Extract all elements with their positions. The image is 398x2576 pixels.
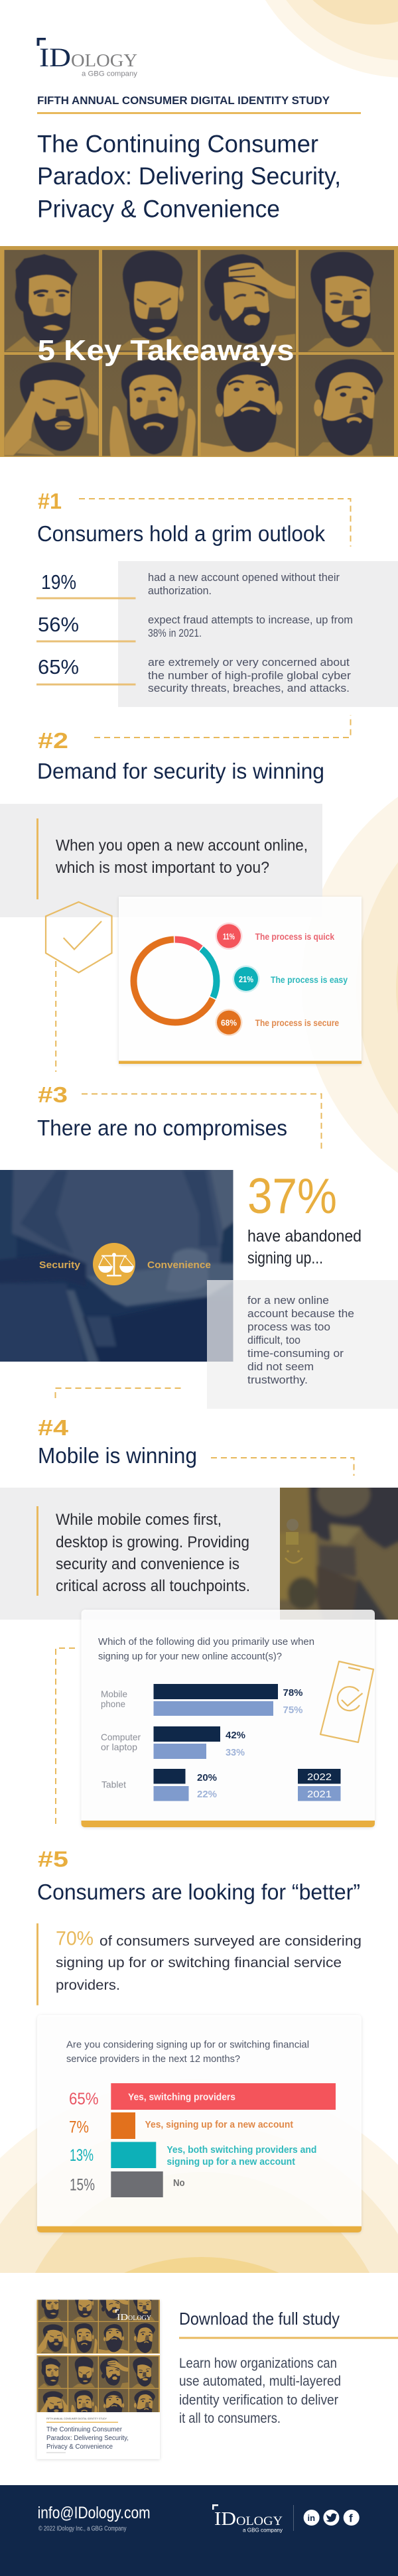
grey explanation panel: difficult, too: [247, 1334, 300, 1346]
stat 65%: the number of high-profile global cyber: [148, 669, 351, 682]
label: convenience: Convenience: [147, 1259, 211, 1271]
section 2: demand for security is winning: [0, 715, 362, 1072]
legend 11%: [215, 923, 334, 950]
bars: computer or laptop: Computer: [101, 1732, 141, 1742]
heading 5: Consumers are looking for “better”: [37, 1880, 360, 1904]
dashed connector 1: [79, 499, 350, 547]
logo: a GBG company: [82, 70, 138, 78]
stat 19%: [36, 570, 340, 600]
grey explanation panel: [207, 1280, 398, 1409]
icon: phone with check: [320, 1661, 373, 1742]
bar 7%: 7%: [69, 2118, 89, 2137]
grey explanation panel: time-consuming or: [247, 1347, 344, 1360]
icon: linkedin: in: [308, 2513, 315, 2523]
download text: use automated, multi-layered: [179, 2374, 341, 2389]
statement with 70%: signing up for or switching financial service: [56, 1955, 342, 1970]
stat 19%: 19%: [41, 570, 76, 594]
grey explanation panel: did not seem: [247, 1360, 314, 1373]
footer logo: a GBG company: [243, 2527, 283, 2534]
icon: facebook: [344, 2510, 360, 2526]
section 3: there are no compromises: [0, 1082, 398, 1409]
number 2: #2: [38, 728, 68, 753]
bars: computer or laptop: [101, 1726, 245, 1759]
statement text: [56, 1511, 250, 1595]
statement with 70%: 70%: [56, 1927, 94, 1949]
chart question: Which of the following did you primarily use when: [98, 1636, 314, 1647]
statement text: While mobile comes first,: [56, 1511, 222, 1529]
question text: [55, 837, 308, 877]
bar 7%: Yes, signing up for a new account: [145, 2119, 293, 2130]
legend 21%: The process is easy: [271, 974, 348, 985]
stat 65%: security threats, breaches, and attacks.: [148, 682, 350, 694]
cover logo: ID: [117, 2313, 128, 2323]
download text: identity verification to deliver: [179, 2393, 338, 2408]
dashed connector 3: [82, 1094, 321, 1151]
photo: person with phone: [280, 1488, 398, 1620]
navy photo with scales: [0, 1163, 240, 1368]
bars: mobile phone: phone: [101, 1699, 125, 1709]
bar 13%: 13%: [70, 2146, 94, 2165]
icon: facebook: f: [349, 2512, 353, 2524]
icon: twitter: [323, 2510, 339, 2526]
statement text: critical across all touchpoints.: [56, 1577, 250, 1595]
bars: computer or laptop: 42%: [226, 1730, 245, 1741]
dashed connector 4 to 5: [56, 1648, 75, 1827]
heading 3: There are no compromises: [37, 1116, 287, 1140]
bar 65%: 65%: [69, 2090, 98, 2108]
heading 1: Consumers hold a grim outlook: [37, 521, 325, 546]
label: security: Security: [39, 1259, 81, 1271]
study cover thumbnail: Paradox: Delivering Security,: [46, 2434, 129, 2442]
stat 56%: 38% in 2021.: [148, 627, 202, 639]
bars: tablet: [101, 1769, 217, 1801]
statement text: desktop is growing. Providing: [56, 1533, 249, 1551]
bar 13%: [70, 2142, 316, 2168]
cover logo: OLOGY: [128, 2315, 151, 2322]
stat 56%: 56%: [38, 613, 79, 636]
stat 37%: 37%: [247, 1168, 337, 1224]
stat 65%: 65%: [38, 655, 79, 678]
stat 56%: [36, 613, 353, 642]
legend: years: [298, 1769, 341, 1801]
stat 19%: had a new account opened without their: [148, 571, 340, 584]
section 5: consumers are looking for better: [36, 1846, 362, 2232]
legend 21%: 21%: [239, 974, 253, 984]
stat 56%: expect fraud attempts to increase, up from: [148, 613, 353, 626]
grey question panel: [0, 804, 322, 917]
section 1: consumers hold a grim outlook: [36, 489, 398, 707]
icon: linkedin: [304, 2510, 320, 2526]
background hills bottom: [0, 2128, 398, 2273]
title: [37, 130, 341, 223]
grey explanation panel: for a new online: [247, 1294, 329, 1307]
bars: computer or laptop: 33%: [226, 1747, 245, 1758]
bar 13%: Yes, both switching providers and: [166, 2144, 316, 2156]
background circles right side: [302, 753, 398, 1217]
legend 21%: [232, 966, 348, 992]
dashed connector 2: [94, 715, 350, 738]
stat 19%: authorization.: [148, 584, 212, 597]
logo: [37, 38, 138, 78]
stat caption: signing up...: [247, 1249, 323, 1267]
study cover thumbnail: Privacy & Convenience: [46, 2443, 113, 2451]
title: Privacy & Convenience: [37, 195, 280, 223]
card: device bar chart: signing up for your new online account(s)?: [98, 1651, 282, 1662]
hero photo grid of expressions: [0, 246, 398, 457]
download text: Learn how organizations can: [179, 2356, 337, 2371]
bars: tablet: Tablet: [101, 1779, 126, 1790]
bar 15%: 15%: [70, 2175, 95, 2194]
card: donut chart: [119, 897, 362, 1064]
grey statement panel: [0, 1488, 280, 1620]
bars: mobile phone: 78%: [283, 1687, 302, 1699]
title: Paradox: Delivering Security,: [37, 162, 341, 190]
statement with 70%: of consumers surveyed are considering: [100, 1934, 362, 1949]
hero heading: 5 Key Takeaways: [38, 334, 295, 367]
bars: tablet: 20%: [197, 1772, 217, 1783]
background circles top right: [241, 0, 398, 78]
logo: ID: [39, 42, 71, 72]
bar 7%: [69, 2112, 293, 2139]
download text: it all to consumers.: [179, 2411, 281, 2426]
footer: [0, 2485, 398, 2576]
card: intent bar chart: service providers in the next 12 months?: [66, 2053, 240, 2065]
legend: years: 2022: [307, 1771, 332, 1783]
stat caption: have abandoned: [247, 1227, 362, 1246]
bar 65%: [69, 2083, 336, 2110]
number 5: #5: [38, 1846, 68, 1871]
section 4: mobile is winning: [0, 1388, 398, 1827]
donut: [134, 939, 216, 1023]
study cover thumbnail: FIFTH ANNUAL CONSUMER DIGITAL IDENTITY STUDY: [46, 2417, 107, 2420]
statement with 70%: [56, 1927, 362, 1993]
download heading: Download the full study: [179, 2309, 340, 2329]
copyright: © 2022 IDology Inc., a GBG Company: [38, 2526, 127, 2532]
legend 11%: 11%: [223, 931, 235, 942]
grey stats panel: [118, 561, 398, 707]
footer logo: ID: [214, 2509, 236, 2530]
heading 4: Mobile is winning: [38, 1443, 197, 1468]
number 4: #4: [38, 1415, 69, 1440]
bars: mobile phone: Mobile: [101, 1689, 127, 1699]
bars: computer or laptop: or laptop: [101, 1742, 137, 1752]
bar 15%: No: [173, 2177, 185, 2189]
bar 15%: [70, 2171, 185, 2197]
stat caption: [247, 1227, 362, 1267]
legend 68%: [215, 1009, 339, 1036]
icon: scales: [93, 1243, 135, 1285]
stat 65%: [36, 655, 351, 694]
grey explanation panel: trustworthy.: [247, 1374, 308, 1386]
card: intent bar chart: [37, 2015, 362, 2232]
logo: OLOGY: [71, 50, 137, 70]
cover logo: [115, 2309, 151, 2323]
question text: which is most important to you?: [55, 859, 269, 877]
number 3: #3: [38, 1082, 68, 1107]
question text: When you open a new account online,: [56, 837, 308, 855]
footer logo: OLOGY: [236, 2514, 283, 2528]
statement text: security and convenience is: [56, 1555, 239, 1573]
statement with 70%: providers.: [56, 1978, 120, 1993]
legend 68%: 68%: [221, 1018, 237, 1028]
card: device bar chart: [56, 1610, 375, 1827]
chart question: Are you considering signing up for or switching financial: [66, 2039, 309, 2051]
icon: shield check: [46, 902, 111, 972]
bars: mobile phone: 75%: [283, 1705, 302, 1716]
legend: years: 2021: [307, 1789, 332, 1800]
bars: mobile phone: [101, 1684, 302, 1716]
footer logo: [212, 2504, 283, 2534]
grey explanation panel: process was too: [247, 1320, 330, 1333]
grey explanation panel: account because the: [247, 1307, 354, 1320]
stat 65%: are extremely or very concerned about: [148, 656, 350, 669]
study cover thumbnail: The Continuing Consumer: [46, 2425, 122, 2433]
legend 68%: The process is secure: [255, 1017, 339, 1028]
heading 2: Demand for security is winning: [37, 759, 324, 783]
bar 65%: Yes, switching providers: [128, 2092, 235, 2103]
eyebrow: study label: FIFTH ANNUAL CONSUMER DIGITAL IDENTITY STUDY: [37, 94, 330, 107]
legend 11%: The process is quick: [255, 931, 334, 942]
dashed connector 3 to 4: [56, 1388, 180, 1401]
bar 13%: signing up for a new account: [166, 2156, 295, 2167]
dashed connector 4: [211, 1458, 354, 1476]
contact email: info@IDology.com: [38, 2504, 151, 2522]
title: The Continuing Consumer: [37, 130, 318, 157]
bars: tablet: 22%: [197, 1789, 217, 1800]
dashed connector 2 to 3: [55, 961, 56, 1072]
download text: [179, 2356, 341, 2426]
number 1: #1: [38, 489, 62, 513]
study cover thumbnail: [37, 2288, 160, 2459]
download section: [37, 2288, 398, 2459]
